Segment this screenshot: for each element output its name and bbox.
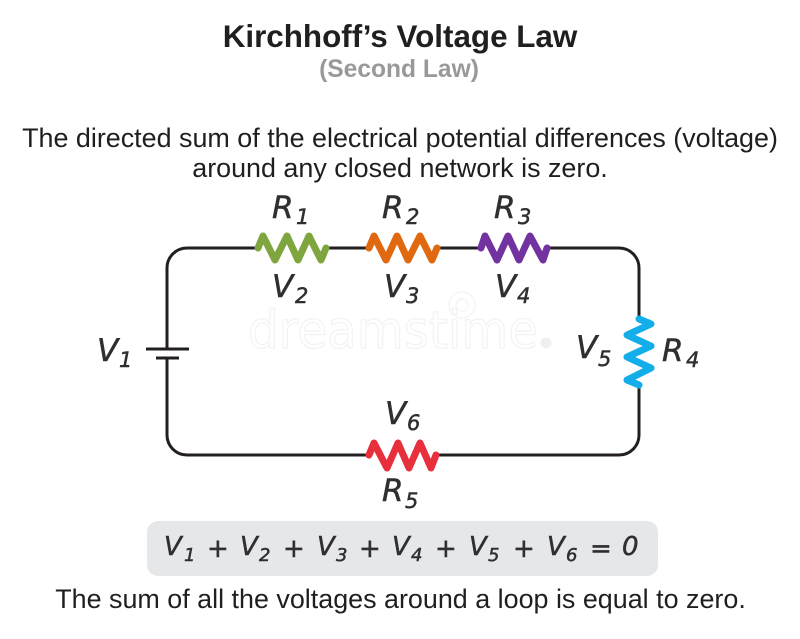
equation: V	[240, 532, 260, 562]
title: Kirchhoff’s Voltage Law	[223, 19, 578, 54]
equation: V	[164, 532, 184, 562]
equation: V	[469, 532, 489, 562]
label R2: R	[382, 190, 404, 226]
definition text: around any closed network is zero.	[192, 153, 608, 183]
subtitle: (Second Law)	[319, 56, 479, 83]
label V1: 1	[119, 348, 132, 372]
label V2: 2	[295, 284, 308, 308]
icon: battery V1	[146, 349, 189, 358]
equation: 4	[411, 545, 422, 566]
label R4: R	[662, 333, 684, 369]
resistor R1	[258, 236, 326, 260]
definition text: The directed sum of the electrical potential differences (voltage)	[22, 123, 778, 153]
label R2: 2	[406, 205, 419, 229]
label R4: 4	[686, 348, 699, 372]
equation: 6	[566, 545, 577, 566]
watermark: dreamstime	[248, 301, 538, 361]
label R1: R	[272, 190, 294, 226]
equation: 3	[336, 545, 347, 566]
equation: =	[590, 534, 612, 564]
equation: V	[317, 532, 337, 562]
label V3: 3	[406, 284, 419, 308]
resistor R3	[481, 236, 547, 260]
label R5: 5	[405, 489, 418, 513]
equation: V	[392, 532, 412, 562]
circuit wire	[167, 248, 639, 455]
equation: 1	[184, 545, 195, 566]
label V4: V	[495, 269, 519, 305]
definition text	[22, 123, 778, 183]
label R3: R	[494, 190, 516, 226]
resistor R4	[627, 319, 651, 385]
resistor R5	[369, 443, 436, 468]
label V4: 4	[517, 284, 530, 308]
equation: +	[435, 534, 457, 564]
label V6: 6	[407, 411, 420, 435]
label V3: V	[384, 269, 408, 305]
equation panel	[147, 521, 658, 576]
equation: 2	[259, 545, 270, 566]
label V6: V	[385, 396, 409, 432]
label R1: 1	[296, 205, 309, 229]
label V2: V	[272, 269, 296, 305]
equation: V	[547, 532, 567, 562]
equation: +	[207, 534, 229, 564]
label V5: V	[576, 330, 600, 366]
label V1: V	[97, 333, 121, 369]
label R3: 3	[518, 205, 531, 229]
label R5: R	[382, 473, 404, 509]
equation: 0	[622, 532, 639, 562]
conclusion text: The sum of all the voltages around a loop is equal to zero.	[55, 584, 746, 614]
equation: +	[283, 534, 305, 564]
label V5: 5	[598, 347, 611, 371]
equation: +	[513, 534, 535, 564]
resistor R2	[369, 236, 437, 260]
equation: +	[359, 534, 381, 564]
equation: 5	[488, 545, 499, 566]
